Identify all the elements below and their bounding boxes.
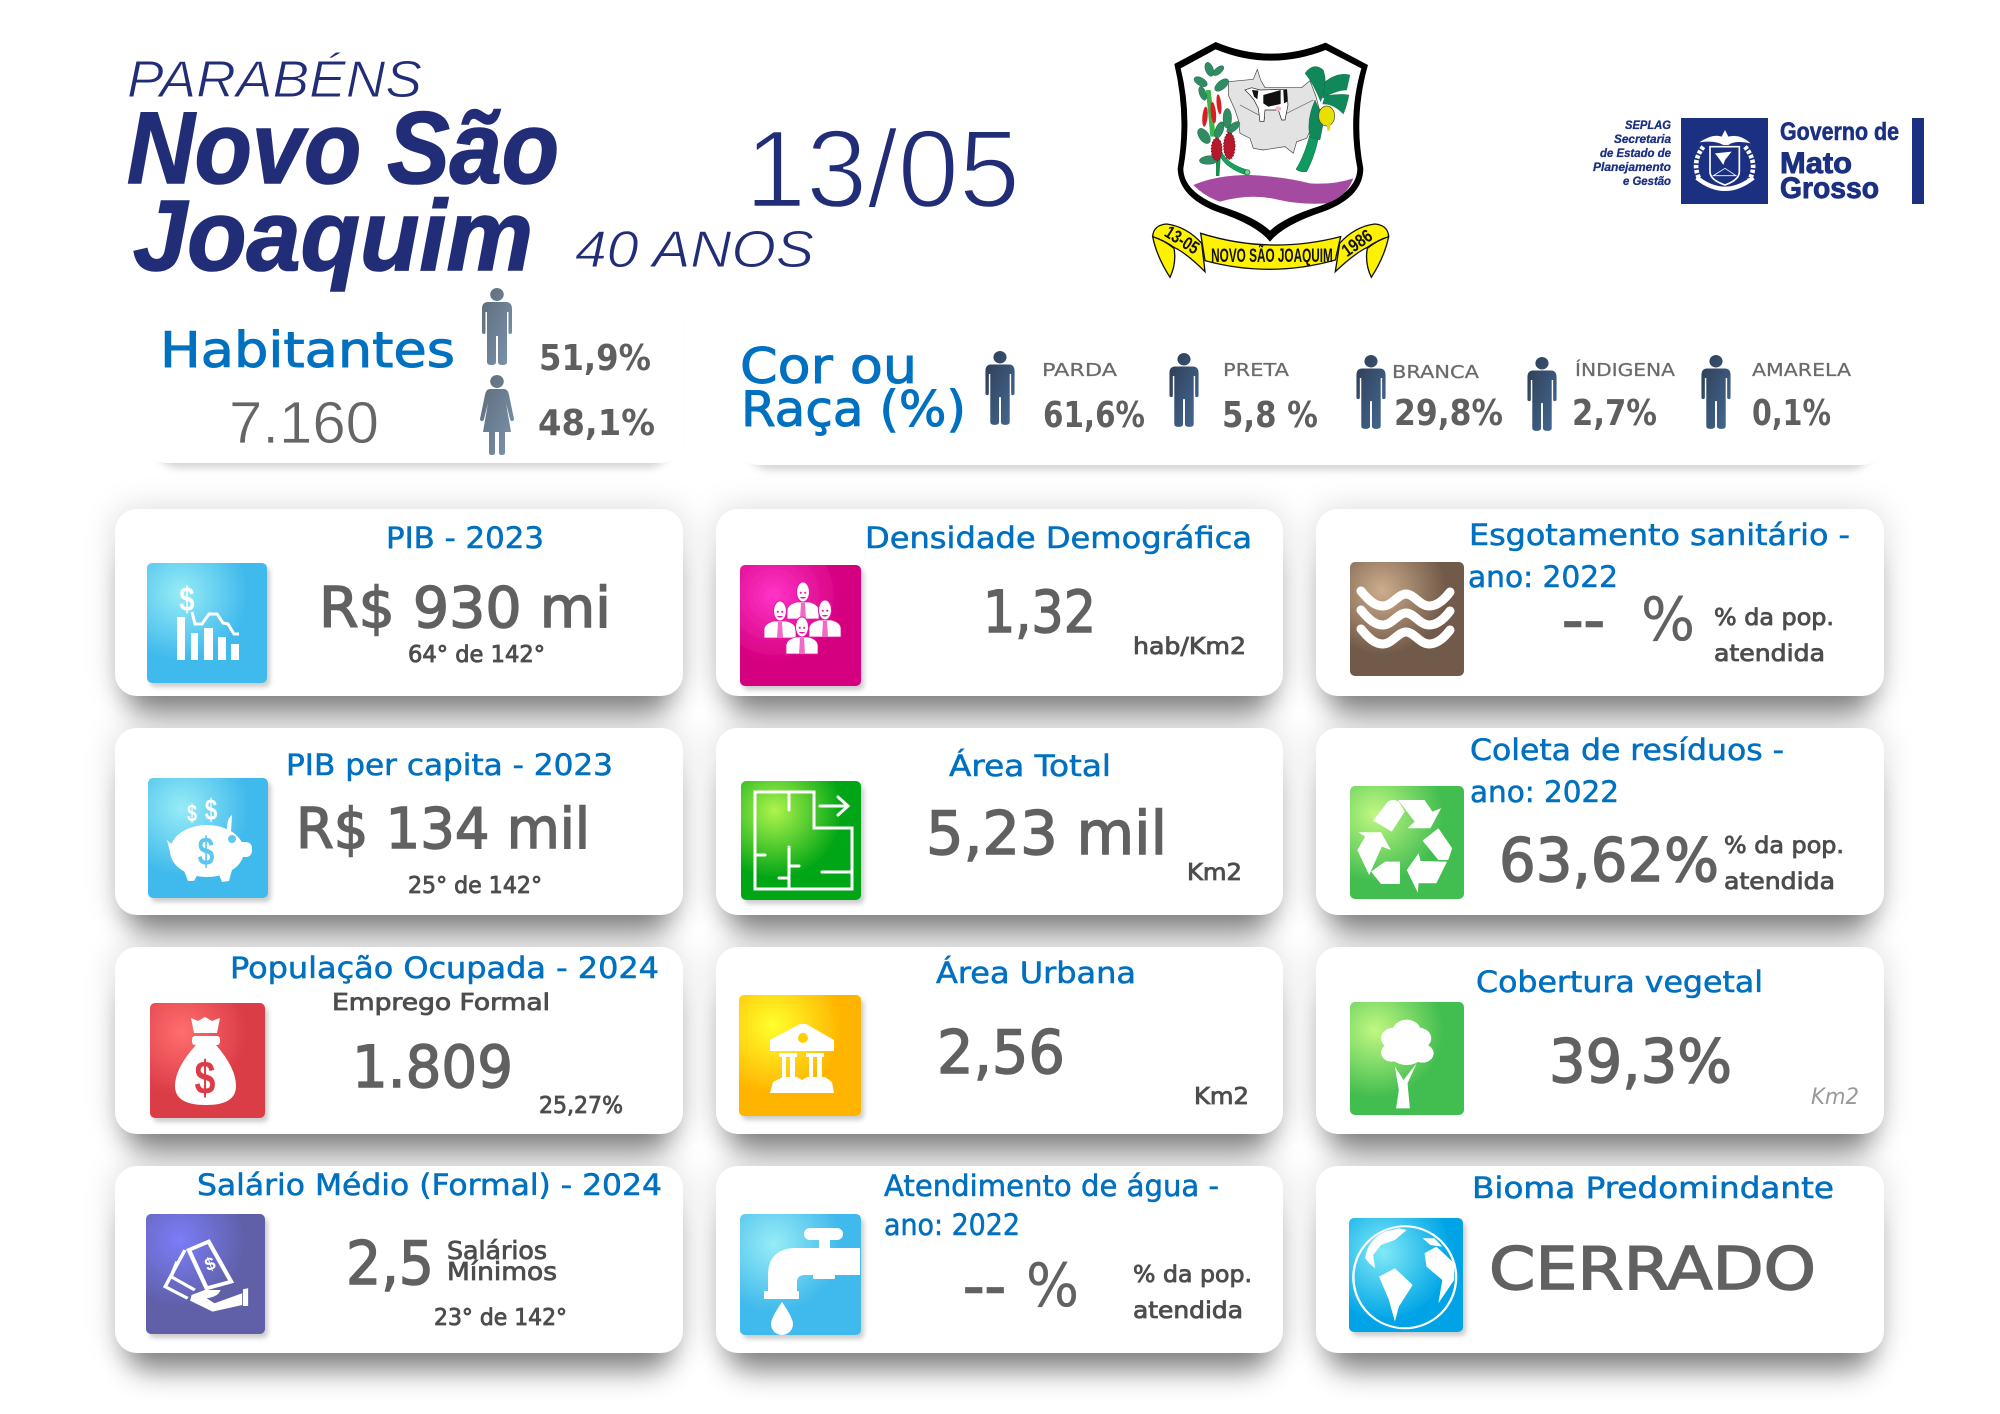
icon: globe [1349, 1218, 1463, 1332]
logo: SEPLAG Governo de Mato Grosso [1593, 118, 1924, 205]
number: male percentage: 51,9% [539, 338, 651, 379]
rank: 25° de 142° [408, 873, 542, 899]
heading: Esgotamento sanitário: ano: 2022 [1468, 560, 1618, 594]
unit: % da pop. atendida: atendida [1133, 1298, 1243, 1324]
group: Amarela: 0,1% [1752, 393, 1831, 434]
group: Preta [1169, 353, 1318, 436]
icon: piggy bank: $ [187, 801, 197, 827]
unit: Km2: Km2 [1187, 860, 1242, 886]
icon: state emblem [1681, 118, 1768, 204]
card: Atendimento de água [716, 1166, 1283, 1353]
panel: Cor ou Raça [735, 322, 1885, 465]
heading: Esgotamento sanitário [1468, 518, 1850, 594]
value: no data [963, 1251, 1079, 1321]
header: title block [127, 51, 814, 292]
text: crest ribbon year: 1986 [1338, 226, 1376, 261]
value: no data [1562, 585, 1695, 655]
heading: Coleta de resíduos: ano: 2022 [1470, 775, 1619, 809]
group: Preta: PRETA [1223, 360, 1290, 381]
value: 1,32: 1,32 [983, 578, 1096, 646]
heading: Salário Médio: Salário Médio (Formal) - 2024 [197, 1168, 662, 1202]
heading: PIB per capita: PIB per capita - 2023 [286, 748, 613, 782]
heading: Cor ou Raça: Cor ou [740, 338, 917, 395]
unit: Km2: Km2 [1811, 1085, 1859, 1110]
unit: Salários Mínimos: Salários [447, 1236, 547, 1265]
unit: Salários Mínimos: Mínimos [447, 1257, 557, 1286]
card: Esgotamento sanitário [1316, 509, 1884, 696]
rank: 64° de 142° [408, 642, 545, 668]
icon: piggy bank: $ [205, 793, 217, 827]
text: SEPLAG department lines: de Estado de [1600, 146, 1671, 160]
text: SEPLAG department lines [1593, 118, 1671, 188]
icon: group of people [740, 565, 861, 686]
icon: piggy bank: $ [198, 830, 215, 874]
group: Amarela: AMARELA [1752, 360, 1852, 381]
heading: Área Urbana: Área Urbana [936, 956, 1136, 990]
value: 1.809: 1.809 [352, 1033, 513, 1101]
icon: hand with cash [146, 1214, 265, 1334]
group: Branca [1356, 355, 1503, 434]
text: SEPLAG department lines: SEPLAG [1625, 118, 1671, 132]
heading: Habitantes: Habitantes [160, 322, 455, 379]
heading: Atendimento de água [884, 1169, 1219, 1242]
heading: Cor ou Raça: Raça (%) [741, 381, 966, 438]
unit: % da pop. atendida: % da pop. [1133, 1262, 1252, 1288]
value: R$ 930 mi: R$ 930 mi [319, 576, 611, 641]
rank: 23° de 142° [434, 1305, 567, 1331]
heading: Cobertura vegetal: Cobertura vegetal [1476, 965, 1763, 999]
group: Parda: PARDA [1042, 360, 1118, 381]
heading: Densidade Demográfica: Densidade Demográfica [865, 521, 1252, 555]
value: CERRADO: CERRADO [1489, 1234, 1816, 1303]
icon: municipal crest [1153, 42, 1389, 277]
number: female percentage: 48,1% [538, 403, 655, 444]
group: Indígena: 2,7% [1572, 393, 1657, 434]
heading: Área Total: Área Total [949, 749, 1111, 783]
unit: % da pop. atendida [1714, 605, 1834, 667]
icon: civic building [739, 995, 861, 1116]
value: 63,62%: 63,62% [1499, 826, 1719, 896]
icon: tree [1350, 1002, 1464, 1115]
unit: Km2: Km2 [1194, 1084, 1249, 1110]
value: 2,56: 2,56 [937, 1018, 1065, 1088]
icon: recycling arrows [1350, 786, 1464, 899]
value: 39,3%: 39,3% [1549, 1027, 1732, 1097]
title: Novo São: Novo São [127, 91, 559, 205]
heading: Esgotamento sanitário: Esgotamento sanitário - [1469, 518, 1850, 552]
group: Branca: 29,8% [1394, 393, 1503, 434]
group: Parda: 61,6% [1043, 395, 1145, 436]
card: PIB 2023 [115, 509, 683, 696]
value: no data: -- [963, 1252, 1006, 1320]
value: no data: -- [1562, 586, 1605, 654]
icon: floor plan [741, 781, 861, 900]
card: Cobertura vegetal [1316, 947, 1884, 1134]
heading: Cor ou Raça [740, 338, 966, 438]
text: crest ribbon date: 13-05 [1161, 222, 1203, 259]
card: População Ocupada [115, 947, 683, 1134]
icon: piggy bank [148, 778, 268, 898]
card: Densidade Demográfica [716, 509, 1283, 696]
heading: Atendimento de água: Atendimento de água - [884, 1169, 1219, 1203]
number: 7.160: 7.160 [229, 390, 379, 456]
date: 13/05: 13/05 [745, 108, 1020, 231]
card: Bioma Predominante [1316, 1166, 1884, 1353]
text: 40 ANOS: 40 ANOS [575, 221, 814, 279]
icon: female figure [480, 375, 514, 455]
heading: Coleta de resíduos: Coleta de resíduos - [1470, 733, 1784, 767]
text: Mato: Mato [1780, 147, 1852, 180]
heading: Bioma Predominante: Bioma Predomindante [1472, 1171, 1834, 1205]
icon: falling chart: $ [179, 580, 195, 619]
icon: water tap [740, 1214, 861, 1335]
value: no data: % [1641, 585, 1695, 655]
group: Indígena [1527, 357, 1676, 434]
text: crest ribbon name: NOVO SÃO JOAQUIM [1211, 243, 1333, 267]
icon: waves [1350, 562, 1464, 676]
icon: hand with cash: $ [202, 1253, 218, 1275]
text: Governo de: Governo de [1780, 118, 1899, 146]
icon: falling chart [147, 563, 267, 683]
card: Área Total [716, 728, 1283, 915]
heading: Coleta de resíduos [1470, 733, 1784, 809]
unit: Salários Mínimos [447, 1236, 557, 1286]
group: Branca: BRANCA [1392, 362, 1480, 383]
value: no data: % [1026, 1251, 1079, 1321]
unit: % da pop. atendida: % da pop. [1714, 605, 1834, 631]
share: 25,27%: 25,27% [539, 1093, 623, 1119]
unit: % da pop. atendida [1724, 833, 1844, 895]
text: SEPLAG department lines: e Gestão [1623, 174, 1671, 188]
text: Grosso: Grosso [1780, 172, 1879, 205]
text: SEPLAG department lines: Planejamento [1593, 160, 1671, 174]
card: Salário Médio [115, 1166, 683, 1353]
unit: hab/Km2: hab/Km2 [1133, 634, 1246, 660]
unit: % da pop. atendida: atendida [1724, 869, 1835, 895]
card: Área Urbana [716, 947, 1283, 1134]
group: Parda [985, 351, 1145, 436]
heading: Atendimento de água: ano: 2022 [884, 1208, 1020, 1242]
icon: male figure [482, 288, 512, 365]
value: 5,23 mil: 5,23 mil [926, 799, 1167, 869]
card: PIB per capita [115, 728, 683, 915]
text: PARABÉNS: PARABÉNS [127, 51, 422, 109]
group: Amarela [1701, 355, 1852, 434]
unit: % da pop. atendida: atendida [1714, 641, 1825, 667]
card: Coleta de resíduos [1316, 728, 1884, 915]
group: Indígena: ÍNDIGENA [1575, 359, 1676, 381]
logo bar [1912, 118, 1924, 204]
value: 2,5: 2,5 [346, 1229, 434, 1299]
panel: Habitantes [143, 288, 683, 463]
group: Preta: 5,8 % [1222, 395, 1318, 436]
title: Joaquim: Joaquim [133, 180, 533, 292]
unit: % da pop. atendida [1133, 1262, 1252, 1324]
value: R$ 134 mil: R$ 134 mil [296, 797, 590, 862]
icon: money bag [150, 1003, 265, 1118]
heading: População Ocupada: População Ocupada - 2024 [230, 951, 659, 985]
text: SEPLAG department lines: Secretaria [1614, 132, 1671, 146]
unit: % da pop. atendida: % da pop. [1724, 833, 1844, 859]
heading: PIB - 2023: PIB - 2023 [386, 521, 544, 555]
icon: money bag: $ [195, 1052, 216, 1105]
label: Emprego Formal: Emprego Formal [332, 990, 550, 1016]
